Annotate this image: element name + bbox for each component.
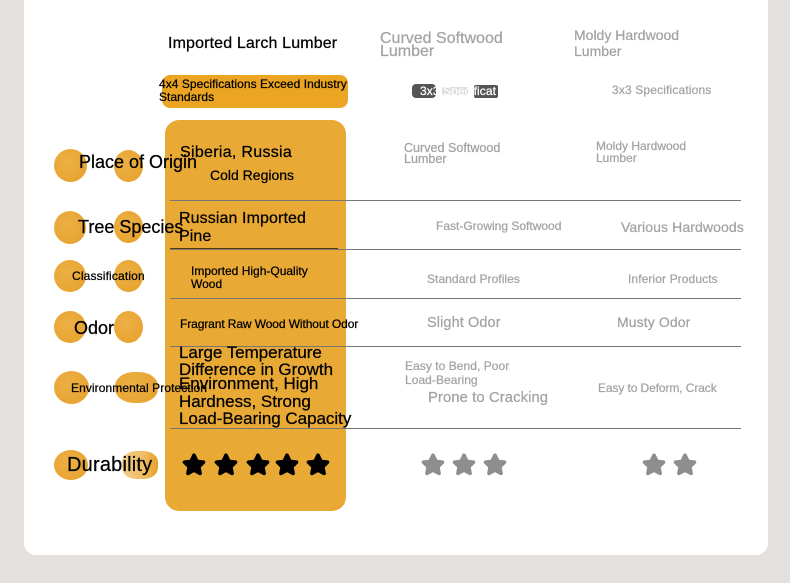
classification values: Wood: [191, 277, 222, 291]
row label: durability: [54, 450, 158, 480]
origin values: Siberia, Russia: [180, 144, 292, 161]
three grey stars: [422, 453, 506, 476]
tree species values: Russian Imported: [179, 210, 306, 227]
column header: curved softwood lumber: Lumber: [380, 43, 434, 60]
specification: 3x3 grey: 3x3 Specifications: [612, 83, 711, 97]
row label: place of origin: Place of Origin: [79, 152, 197, 172]
origin sub value: Cold Regions: [210, 167, 294, 183]
origin curved softwood: Curved Softwood: [404, 141, 500, 155]
tree species values: [179, 210, 306, 245]
easy to bend: [405, 359, 510, 387]
column header: moldy hardwood lumber: Moldy Hardwood: [574, 27, 679, 43]
row label: odor: [54, 311, 143, 343]
musty odor: Musty Odor: [617, 314, 690, 330]
fast-growing softwood: Fast-Growing Softwood: [436, 219, 561, 233]
odor values: Fragrant Raw Wood Without Odor: [180, 317, 358, 331]
environment value: Large Temperature: [179, 343, 322, 362]
classification values: [190, 264, 308, 291]
easy to deform: Easy to Deform, Crack: [598, 381, 717, 395]
origin moldy hardwood: Lumber: [596, 151, 637, 165]
tree species values: Pine: [179, 228, 211, 245]
row label: tree species: [54, 211, 183, 244]
environment value: Hardness, Strong: [179, 392, 311, 411]
row label: durability: Durability: [67, 454, 152, 476]
origin curved softwood: Lumber: [404, 152, 447, 166]
column header: curved softwood lumber: Curved Softwood: [380, 30, 503, 47]
highlighted column card: [165, 120, 346, 511]
column header: moldy hardwood lumber: Lumber: [574, 43, 621, 59]
row label: classification: [54, 260, 145, 292]
specification: dark 3x3 label: 3x3 Specificat: [420, 84, 496, 98]
row label: environmental protection: [54, 371, 207, 404]
row label: place of origin: [54, 149, 197, 182]
origin curved softwood: [404, 141, 500, 166]
origin moldy hardwood: Moldy Hardwood: [596, 139, 686, 153]
environment value: Load-Bearing Capacity: [179, 409, 351, 428]
standard profiles: Standard Profiles: [427, 272, 520, 286]
classification values: Imported High-Quality: [191, 264, 308, 278]
slight odor: Slight Odor: [427, 315, 501, 331]
row label: environmental protection: Environmental Protection: [71, 381, 207, 395]
column header: imported larch lumber: Imported Larch Lumber: [168, 35, 337, 52]
easy to bend: Load-Bearing: [405, 373, 478, 387]
row label: tree species: Tree Species: [78, 217, 183, 237]
column header: curved softwood lumber: [380, 30, 503, 60]
prone to cracking: Prone to Cracking: [428, 390, 548, 406]
origin moldy hardwood: [596, 139, 686, 165]
environment value: Difference in Growth: [179, 360, 333, 379]
specification row: highlighted badge: [159, 75, 348, 108]
environment value: Environment, High: [179, 374, 318, 393]
two grey stars: [642, 453, 696, 476]
row label: classification: Classification: [72, 269, 145, 283]
specification row: highlighted badge: Standards: [159, 90, 214, 104]
row dividers: [170, 200, 741, 429]
specification row: highlighted badge: 4x4 Specifications Exceed Industry: [159, 77, 347, 91]
various hardwoods: Various Hardwoods: [621, 219, 744, 235]
row label: odor: Odor: [74, 318, 114, 338]
environment value: [179, 343, 352, 428]
inferior products: Inferior Products: [628, 272, 718, 286]
five black stars: [182, 453, 330, 476]
easy to bend: Easy to Bend, Poor: [405, 359, 509, 373]
column header: moldy hardwood lumber: [574, 27, 679, 59]
